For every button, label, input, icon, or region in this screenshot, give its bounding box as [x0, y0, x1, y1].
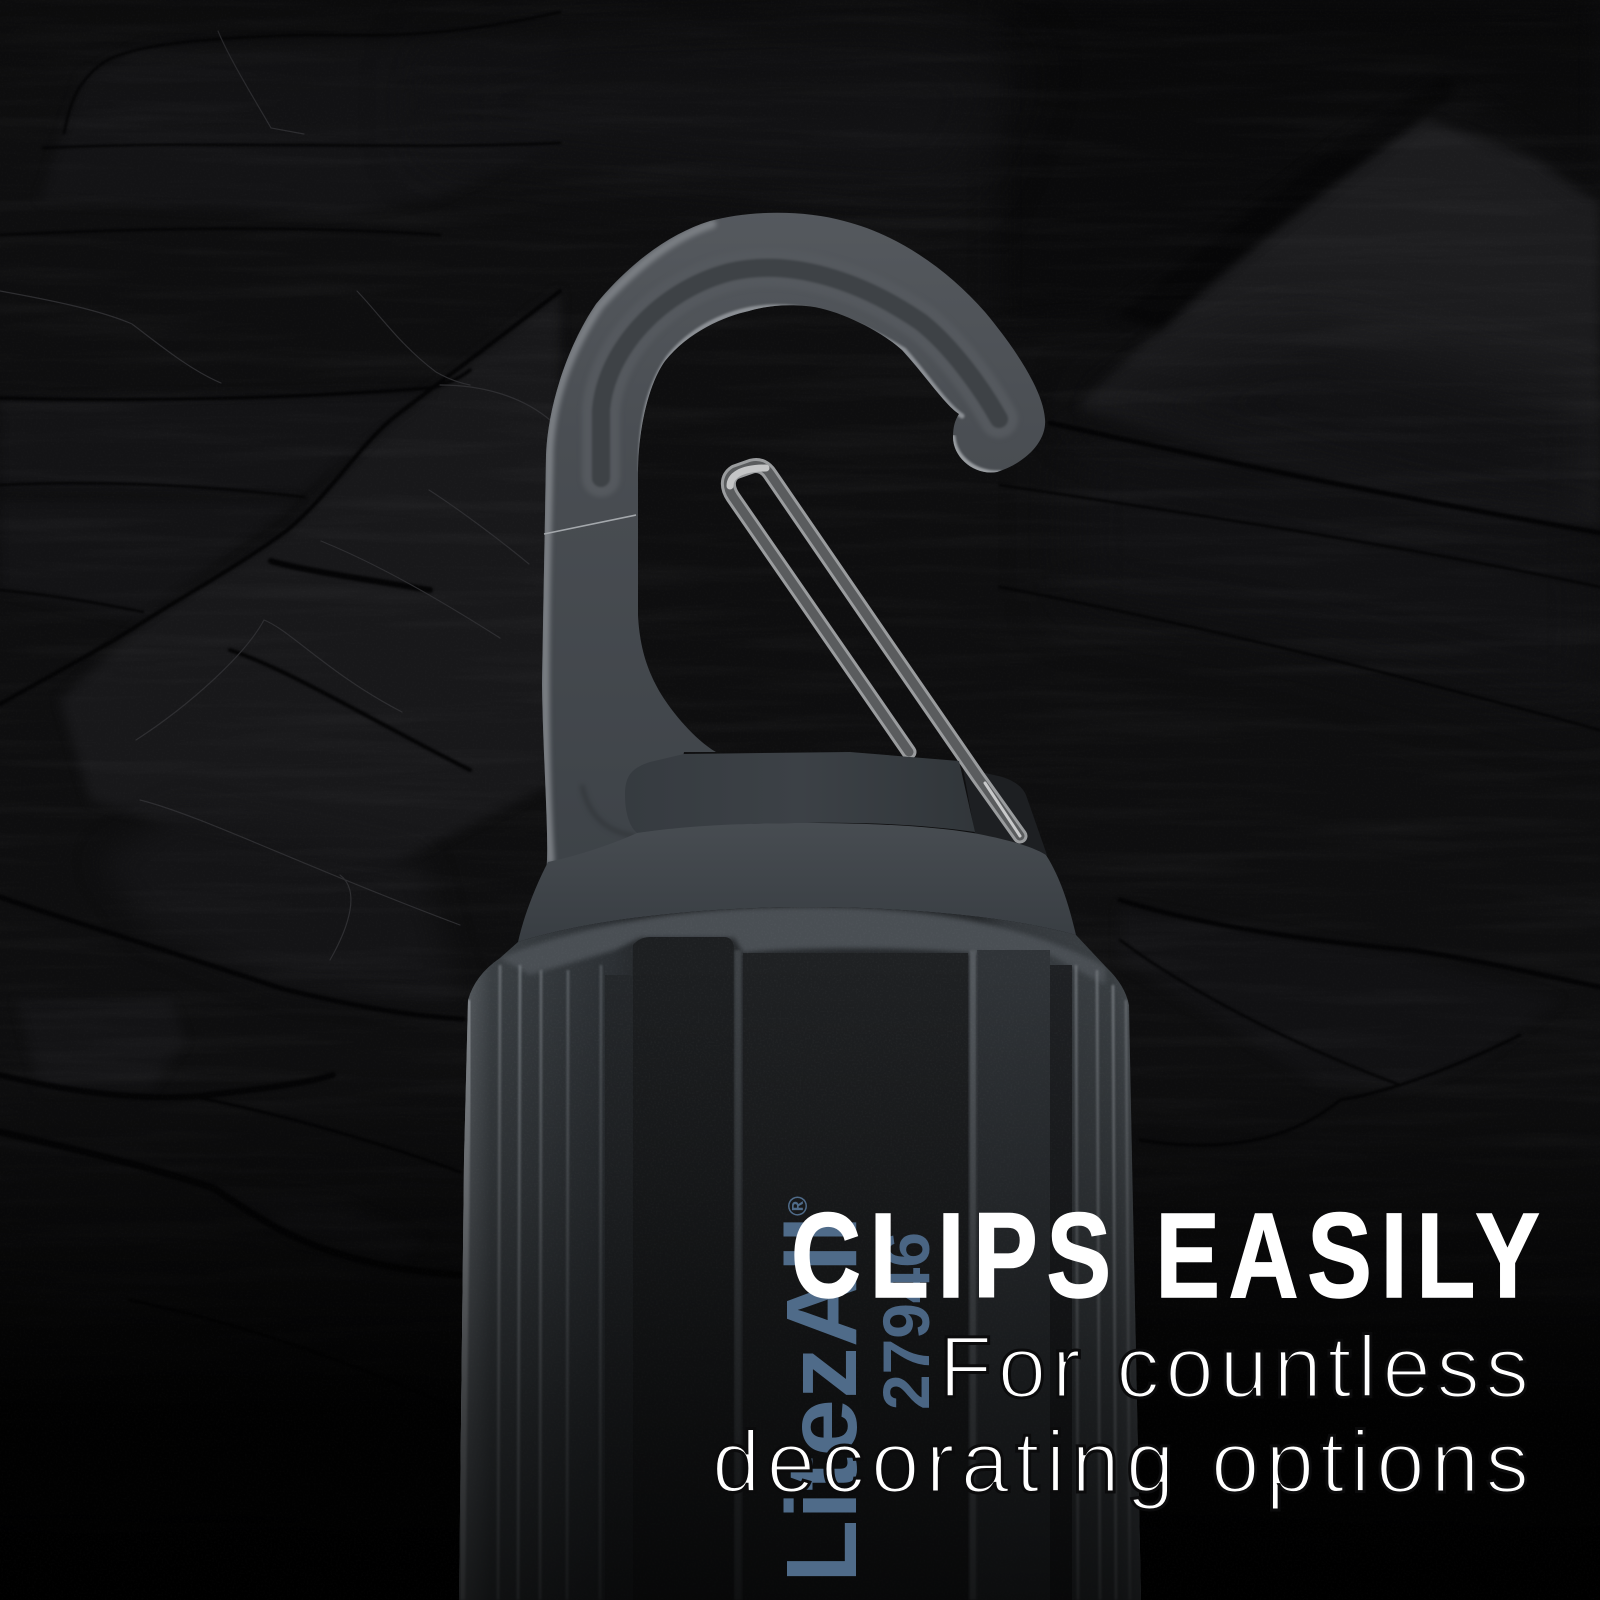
- wire clip: [728, 465, 1020, 836]
- body: ribs: [498, 950, 1130, 1600]
- heading: CLIPS EASILY: [791, 1189, 1540, 1324]
- rock: upper left slab: [40, 36, 560, 215]
- logo: item number: 27946: [869, 1232, 943, 1410]
- rock: light veins: [0, 31, 550, 960]
- logo: brand name: LitezAll: [766, 1215, 878, 1583]
- body: silver left edge: [461, 1000, 470, 1600]
- body: [450, 900, 1150, 1600]
- hook: seam line: [544, 515, 636, 534]
- tab behind wire clip: [963, 768, 1047, 855]
- hook: [542, 213, 1045, 870]
- rock: low left lobes: [17, 1000, 185, 1090]
- rock: low right lobes: [1120, 905, 1560, 1090]
- hook: details clipped to silhouette: [545, 224, 1000, 860]
- logo: registered mark: ®: [783, 1196, 813, 1216]
- body: top band: [500, 907, 1106, 985]
- body: left dark panel: [633, 937, 734, 1282]
- body: surface grain: [459, 900, 1149, 1600]
- rock: dark diagonal band: [1115, 77, 1460, 330]
- subheading line 2: decorating options: [712, 1414, 1529, 1511]
- collar: [518, 823, 1076, 942]
- product: clip light: [450, 213, 1150, 1600]
- rock: lighter right slab: [1077, 117, 1600, 525]
- hook foot crease: [582, 785, 635, 836]
- rock: mid left bands: [0, 392, 430, 495]
- top cap: [625, 752, 975, 833]
- rock: left slab under diagonal crack: [60, 291, 560, 880]
- rock: upper centre block: [430, 20, 1020, 200]
- rock: slab fade toward lower edge: [1077, 330, 1600, 525]
- subheading line 1: For countless: [939, 1319, 1529, 1416]
- body: right side panel: [977, 950, 1050, 1236]
- rock: right mid slab: [1070, 430, 1600, 720]
- body: centre panel: [743, 953, 968, 1057]
- rock: top right dark area: [1000, 0, 1600, 330]
- caption: [712, 1189, 1540, 1511]
- body: vertical fade: [459, 1013, 1141, 1600]
